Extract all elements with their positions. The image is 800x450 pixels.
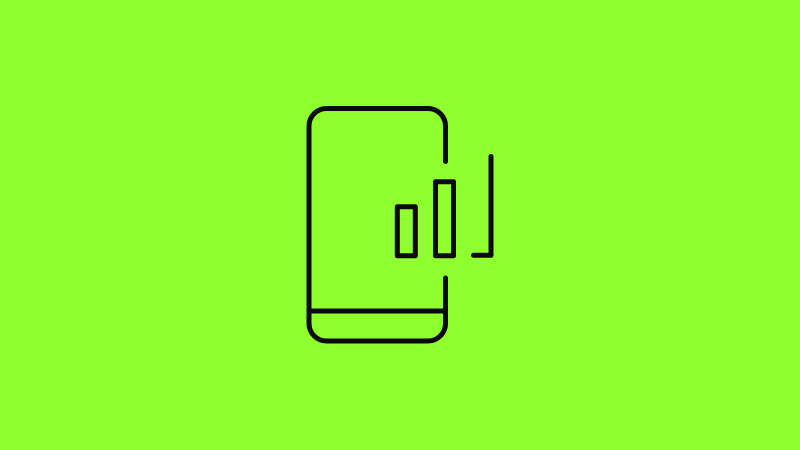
phone body outline	[309, 108, 446, 341]
small chart bar	[397, 207, 415, 256]
tall chart bar	[436, 182, 454, 256]
chart axis bracket	[474, 156, 491, 255]
phone home bar divider	[309, 308, 446, 314]
